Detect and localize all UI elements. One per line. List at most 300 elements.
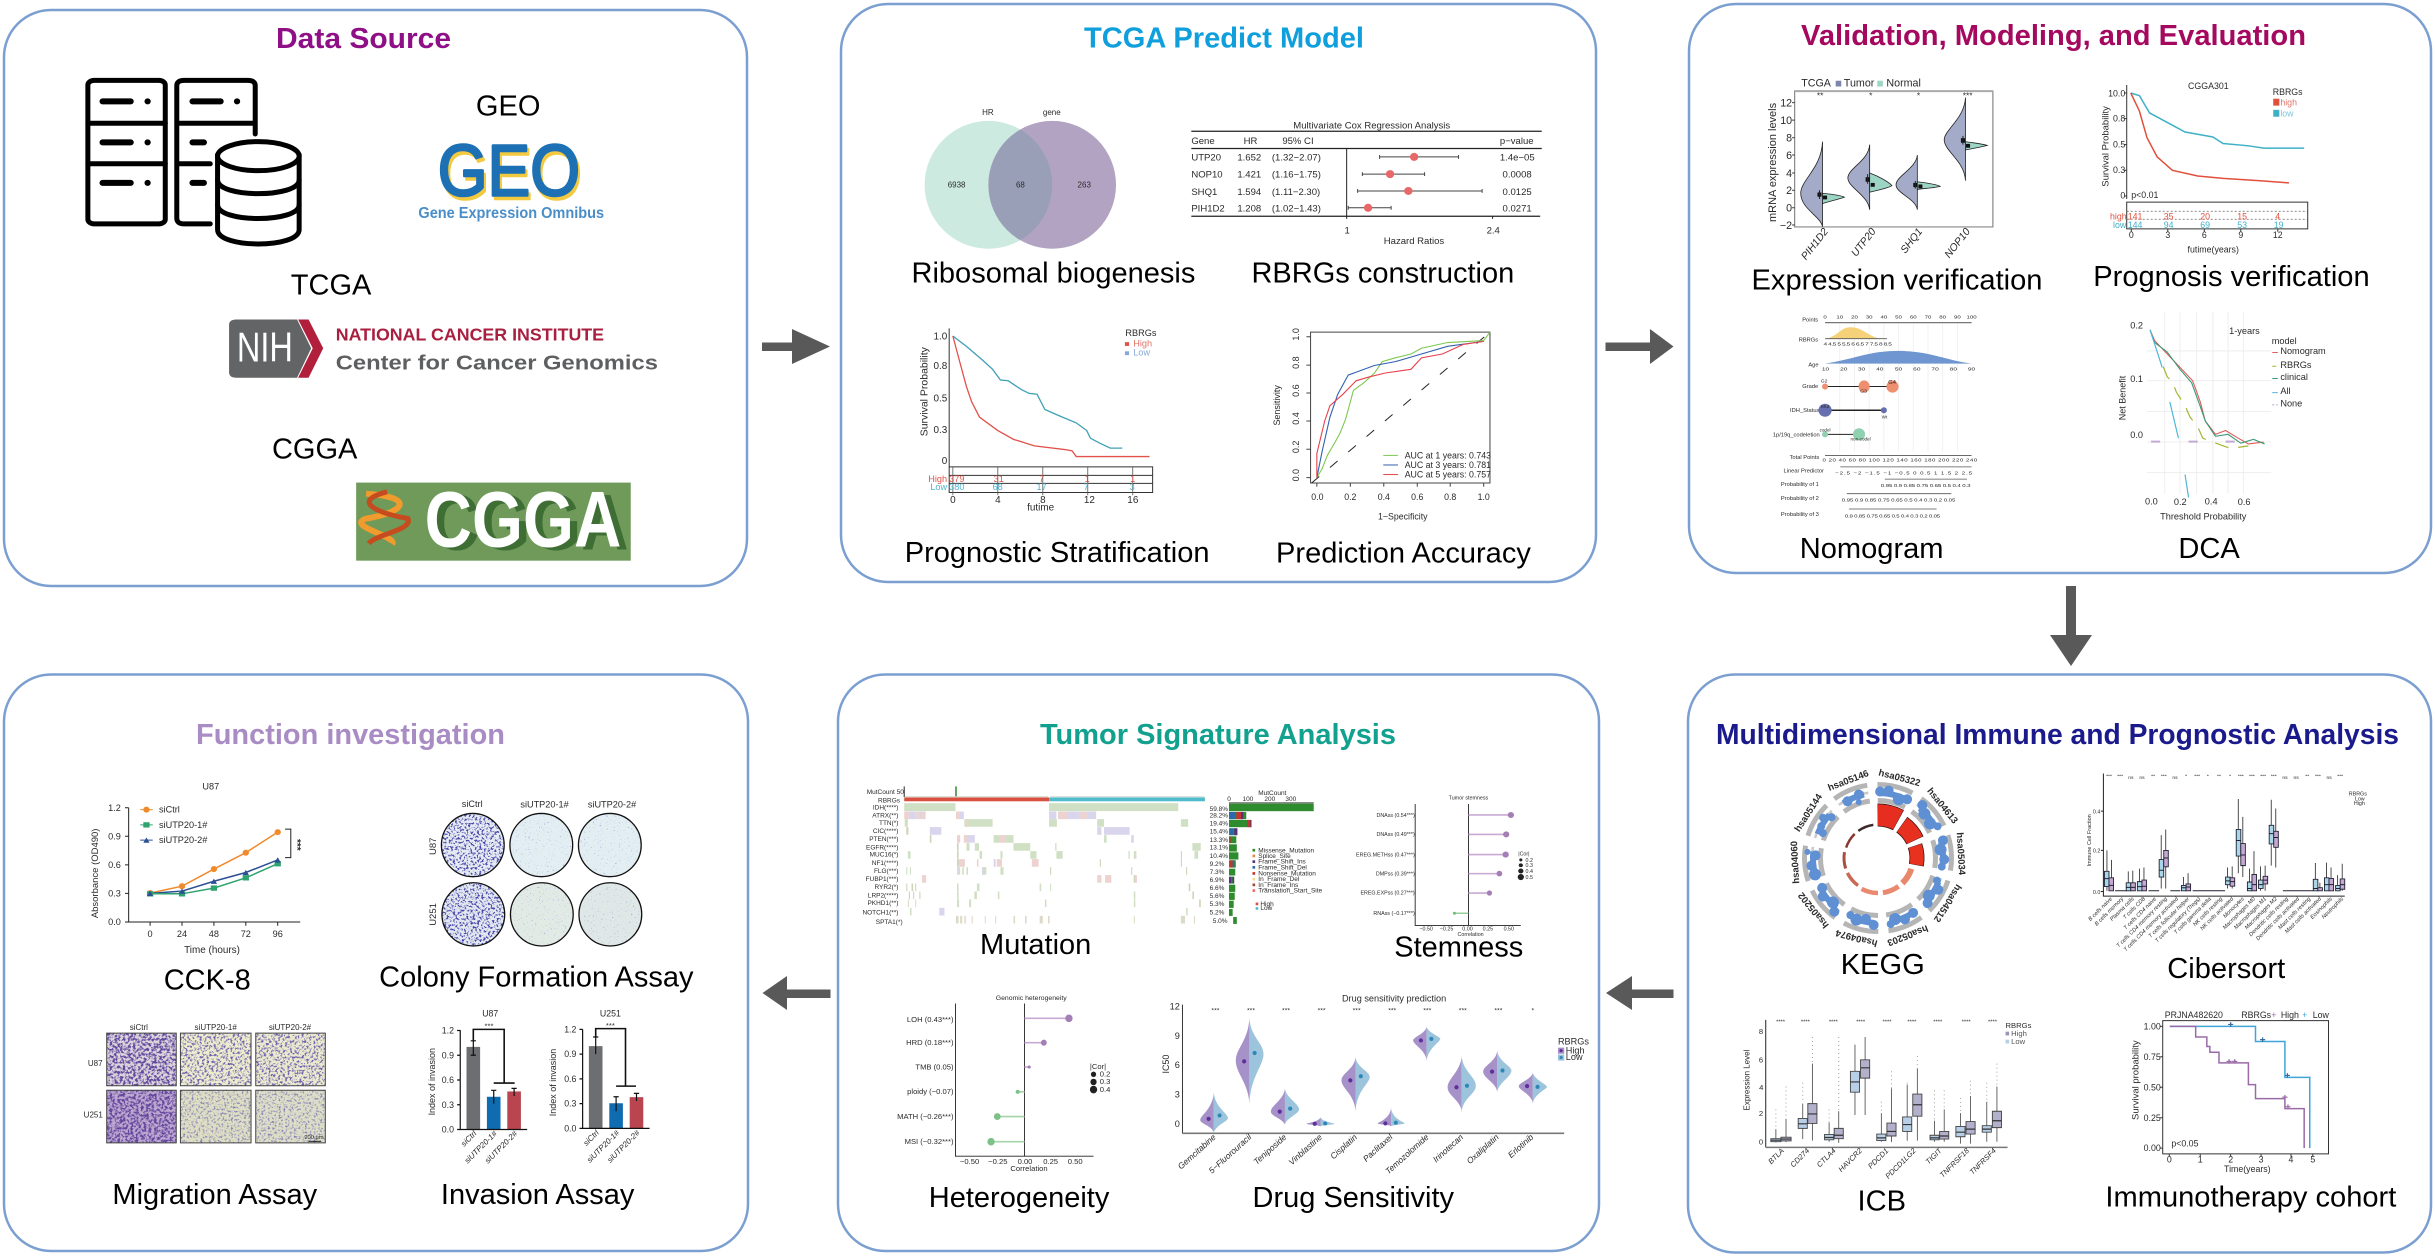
caption: Colony Formation Assay <box>379 962 694 994</box>
colony formation plates: U251 <box>428 903 439 926</box>
box plot: Cibersort immune fractions: Monocytes <box>2222 896 2246 920</box>
survival curve: immunotherapy cohort: 3 <box>2259 1155 2264 1165</box>
oncoplot: mutation landscape: RYR2(*) <box>874 884 898 891</box>
bar chart: invasion U87: siCtrl <box>459 1129 479 1148</box>
box plot: Cibersort immune fractions: ** <box>2217 774 2221 780</box>
forest plot: multivariate Cox: 0.0125 <box>1503 187 1532 198</box>
oncoplot: mutation landscape: 100 <box>1242 796 1254 803</box>
nomogram: 50 <box>1895 315 1902 320</box>
lollipop chart: tumor stemness: Tumor stemness <box>1449 795 1489 801</box>
survival curve: CGGA301: 144 <box>2128 220 2143 230</box>
oncoplot: mutation landscape: 300 <box>1285 796 1297 803</box>
lollipop chart: genomic heterogeneity: ploidy (−0.07) <box>907 1087 954 1096</box>
forest plot: multivariate Cox: 0.0008 <box>1503 170 1532 181</box>
bar chart: invasion U87: 0.0 <box>442 1125 454 1135</box>
ROC curves: Sensitivity <box>1272 385 1282 426</box>
ROC curves: AUC at 1 years: 0.743 <box>1405 450 1491 460</box>
oncoplot: mutation landscape: 19.4% <box>1210 821 1228 828</box>
violin chart: mRNA expression: PIH1D2 <box>1800 226 1831 262</box>
box plot: Cibersort immune fractions: * <box>2207 774 2209 780</box>
lollipop chart: tumor stemness: 0.2 <box>1526 858 1533 864</box>
box plot: Cibersort immune fractions <box>2087 773 2367 953</box>
oncoplot: mutation landscape: Translation_Start_Site <box>1258 888 1323 895</box>
decision curve analysis: clinical <box>2280 372 2308 382</box>
split violin chart: drug sensitivity: RBRGs <box>1558 1037 1589 1047</box>
nomogram: Probability of 1 <box>1781 482 1819 488</box>
box plot: immune checkpoint genes: PDCD1 <box>1866 1146 1890 1171</box>
oncoplot: mutation landscape: 5.2% <box>1210 909 1225 916</box>
bar chart: invasion U251: siUTP20-1# <box>585 1128 622 1165</box>
violin chart: mRNA expression: 6 <box>1786 150 1792 162</box>
box plot: Cibersort immune fractions: * <box>2185 774 2187 780</box>
logo: CGGA: CGGA <box>425 476 621 564</box>
oncoplot: mutation landscape: Frame_Shift_Ins <box>1258 859 1306 866</box>
survival curve: high vs low: 0 <box>942 456 948 467</box>
bar chart: invasion U251 <box>548 1008 650 1165</box>
line chart: CCK-8: 1.2 <box>108 803 121 813</box>
heading: Tumor Signature Analysis: Tumor Signature Analysis <box>1040 719 1396 751</box>
decision curve analysis <box>2118 312 2326 521</box>
bar chart: invasion U87: *** <box>485 1022 493 1031</box>
decision curve analysis: All <box>2280 386 2291 396</box>
nomogram: Linear Predictor <box>1783 469 1824 475</box>
box plot: Cibersort immune fractions: ns <box>2172 776 2178 781</box>
split violin chart: drug sensitivity: *** <box>1211 1008 1220 1015</box>
survival curve: high vs low: 68 <box>993 482 1003 492</box>
nomogram: 60 <box>1910 315 1917 320</box>
box plot: immune checkpoint genes: High <box>2011 1029 2027 1038</box>
circular KEGG enrichment plot: hsa05202 <box>1796 890 1832 930</box>
heading: Function investigation: Function investigation <box>196 719 505 751</box>
survival curve: immunotherapy cohort: + <box>2302 1010 2307 1020</box>
logo: Gene Expression Omnibus: GEO <box>440 134 582 215</box>
decision curve analysis: Nomogram <box>2280 346 2326 356</box>
box plot: Cibersort immune fractions: Macrophages M2 <box>2244 896 2279 931</box>
lollipop chart: tumor stemness: EREG.METHss (0.47***) <box>1356 852 1415 858</box>
survival curve: high vs low: 1 <box>1085 474 1090 484</box>
violin chart: mRNA expression: UTP20 <box>1850 226 1879 259</box>
survival curve: high vs low: Low <box>930 482 948 492</box>
survival curve: high vs low: 0.8 <box>933 361 948 372</box>
bar chart: invasion U251: 0.6 <box>564 1074 577 1084</box>
box plot: Cibersort immune fractions: ns <box>2128 776 2134 781</box>
decision curve analysis: 0.2 <box>2174 497 2187 507</box>
line chart: CCK-8: 48 <box>209 929 219 939</box>
survival curve: high vs low: 7 <box>1084 482 1089 492</box>
lollipop chart: tumor stemness: DMPss (0.39***) <box>1376 872 1415 878</box>
survival curve: immunotherapy cohort: 0.25 <box>2144 1113 2161 1123</box>
nomogram: 90 <box>1968 367 1976 372</box>
bar chart: invasion U251: U251 <box>600 1008 621 1018</box>
lollipop chart: tumor stemness: 0.50 <box>1504 927 1514 933</box>
oncoplot: mutation landscape: Frame_Shift_Del <box>1258 864 1307 871</box>
forest plot: multivariate Cox: (1.02−1.43) <box>1272 204 1321 215</box>
box plot: Cibersort immune fractions: *** <box>2315 774 2321 780</box>
forest plot: multivariate Cox: Gene <box>1191 136 1215 147</box>
box plot: Cibersort immune fractions: Dendritic cells activated <box>2255 896 2302 942</box>
logo: NIH National Cancer Institute: Center for Cancer Genomics <box>336 352 658 374</box>
colony formation plates: siUTP20-2# <box>588 800 637 810</box>
ROC curves: 0.8 <box>1444 492 1456 502</box>
bar chart: invasion U87: U87 <box>482 1008 498 1018</box>
oncoplot: mutation landscape: FLG(***) <box>874 868 898 875</box>
box plot: immune checkpoint genes: **** <box>1962 1020 1971 1026</box>
split violin chart: drug sensitivity: Irinotecan <box>1431 1132 1465 1164</box>
violin chart: mRNA expression: 10 <box>1780 115 1792 127</box>
forest plot: multivariate Cox: Multivariate Cox Regression Analysis <box>1293 121 1450 132</box>
nomogram: non-codel <box>1850 436 1871 441</box>
oncoplot: mutation landscape: 5.0% <box>1213 918 1228 925</box>
panel: Validation, Modeling, and Evaluation <box>1689 4 2431 573</box>
line chart: CCK-8: U87 <box>202 781 219 791</box>
oncoplot: mutation landscape: MutCount <box>1258 790 1287 797</box>
survival curve: CGGA301: 9 <box>2238 230 2243 240</box>
ROC curves: 1.0 <box>1478 492 1490 502</box>
ROC curves: 0.2 <box>1291 441 1301 453</box>
heading: TCGA Predict Model: TCGA Predict Model <box>1084 22 1364 54</box>
box plot: Cibersort immune fractions: T cells CD4 memory resting <box>2116 896 2169 949</box>
survival curve: immunotherapy cohort: 0 <box>2167 1155 2172 1165</box>
nomogram: 0.9 0.85 0.75 0.65 0.5 0.4 0.3 0.2 0.05 <box>1845 514 1940 519</box>
lollipop chart: tumor stemness: 0.4 <box>1526 869 1533 875</box>
caption: Mutation <box>980 929 1091 961</box>
oncoplot: mutation landscape: Nonsense_Mutation <box>1258 871 1316 878</box>
venn diagram: HR <box>982 108 994 117</box>
split violin chart: drug sensitivity: *** <box>1247 1008 1255 1015</box>
line chart: CCK-8: 0.0 <box>108 917 121 927</box>
oncoplot: mutation landscape: PKHD1(**) <box>867 900 898 907</box>
bar chart: invasion U87: Index of invasion <box>427 1048 437 1115</box>
survival curve: CGGA301: 35 <box>2164 212 2174 222</box>
box plot: Cibersort immune fractions: B cells memory <box>2094 895 2126 928</box>
survival curve: CGGA301: high <box>2280 98 2297 108</box>
heading: Multidimensional Immune and Prognostic Analysis: Multidimensional Immune and Prognostic Analysis <box>1716 719 2399 751</box>
oncoplot: mutation landscape: In_Frame_Ins <box>1258 882 1298 889</box>
box plot: Cibersort immune fractions: Immune Cell Fraction <box>2087 814 2093 866</box>
forest plot: multivariate Cox: (1.16−1.75) <box>1272 170 1321 181</box>
oncoplot: mutation landscape: 6.9% <box>1210 877 1225 884</box>
box plot: immune checkpoint genes: **** <box>1776 1020 1786 1026</box>
migration assay images: 200 μm <box>304 1135 324 1141</box>
oncoplot: mutation landscape: ATRX(**) <box>872 812 898 819</box>
panel: Function investigation <box>4 674 748 1251</box>
forest plot: multivariate Cox: Hazard Ratios <box>1384 236 1444 247</box>
ROC curves: 0.6 <box>1291 384 1301 397</box>
lollipop chart: tumor stemness: −0.25 <box>1440 927 1453 933</box>
box plot: Cibersort immune fractions: *** <box>2271 774 2277 780</box>
split violin chart: drug sensitivity: *** <box>1388 1008 1397 1015</box>
survival curve: immunotherapy cohort: 2 <box>2228 1155 2233 1165</box>
lollipop chart: tumor stemness: DNAss (0.49***) <box>1376 832 1415 838</box>
lollipop chart: genomic heterogeneity: −0.50 <box>960 1157 979 1166</box>
nomogram: 80 <box>1939 315 1946 320</box>
box plot: immune checkpoint genes: **** <box>1883 1020 1892 1026</box>
box plot: immune checkpoint genes: 4 <box>1759 1083 1764 1092</box>
colony formation plates: U87 <box>428 838 439 855</box>
oncoplot: mutation landscape: LRP2(****) <box>868 893 898 900</box>
violin chart: mRNA expression: 2 <box>1786 185 1792 197</box>
box plot: Cibersort immune fractions: RBRGs <box>2349 792 2367 798</box>
ROC curves: AUC at 5 years: 0.757 <box>1405 470 1491 480</box>
line chart: CCK-8: siUTP20-1# <box>159 820 208 830</box>
survival curve: CGGA301: 94 <box>2164 220 2174 230</box>
circular KEGG enrichment plot: hsa04974 <box>1834 927 1879 949</box>
heading: Data Source: Data Source <box>276 23 451 55</box>
nomogram: 4 4.5 5 5.5 6 6.5 7 7.5 8 8.5 <box>1824 342 1892 347</box>
ROC curves: 0.4 <box>1291 412 1301 425</box>
bar chart: invasion U87: 0.3 <box>442 1100 454 1110</box>
oncoplot: mutation landscape: RBRGs <box>878 797 900 804</box>
split violin chart: drug sensitivity: Temozolomide <box>1383 1132 1431 1176</box>
box plot: Cibersort immune fractions: *** <box>2337 774 2343 780</box>
lollipop chart: tumor stemness <box>1356 795 1533 938</box>
violin chart: mRNA expression: Normal <box>1886 77 1921 89</box>
box plot: Cibersort immune fractions: ** <box>2151 774 2155 780</box>
circular KEGG enrichment plot: hsa05034 <box>1954 832 1967 876</box>
oncoplot: mutation landscape: 28.2% <box>1210 813 1228 820</box>
split violin chart: drug sensitivity: Erlotinib <box>1506 1132 1535 1160</box>
survival curve: high vs low: High <box>928 474 947 484</box>
survival curve: immunotherapy cohort: 0.50 <box>2144 1082 2161 1092</box>
survival curve: CGGA301: low <box>2113 220 2127 230</box>
bar chart: invasion U251: 1.2 <box>564 1024 577 1034</box>
circular KEGG enrichment plot <box>1789 767 1967 949</box>
survival curve: CGGA301: 0.3 <box>2113 165 2125 175</box>
box plot: Cibersort immune fractions: NK cells resting <box>2192 896 2225 928</box>
split violin chart: drug sensitivity: Gemcitabine <box>1176 1132 1218 1171</box>
caption: DCA <box>2178 533 2240 565</box>
caption: Cibersort <box>2167 953 2285 985</box>
survival curve: high vs low <box>920 328 1157 514</box>
bar chart: invasion U87: 0.9 <box>442 1050 454 1060</box>
nomogram: Probability of 3 <box>1781 512 1819 518</box>
survival curve: CGGA301: 69 <box>2200 220 2210 230</box>
box plot: Cibersort immune fractions: T cells follicular helper <box>2148 896 2192 940</box>
ROC curves: 0.2 <box>1344 492 1357 502</box>
box plot: Cibersort immune fractions: T cells gamma delta <box>2173 896 2213 936</box>
split violin chart: drug sensitivity: 6 <box>1175 1060 1180 1070</box>
split violin chart: drug sensitivity: *** <box>1459 1008 1467 1015</box>
nomogram: Grade <box>1802 384 1818 390</box>
line chart: CCK-8: *** <box>291 839 302 851</box>
box plot: Cibersort immune fractions: Plasma cells <box>2109 896 2136 923</box>
ROC curves <box>1272 328 1491 522</box>
circular KEGG enrichment plot: hsa05144 <box>1793 792 1825 834</box>
nomogram: 30 <box>1866 315 1873 320</box>
forest plot: multivariate Cox: 1.208 <box>1237 204 1261 215</box>
survival curve: immunotherapy cohort: 0.75 <box>2144 1052 2161 1062</box>
survival curve: high vs low: 0.5 <box>933 393 948 404</box>
ROC curves: 0.6 <box>1411 492 1423 502</box>
violin chart: mRNA expression: 8 <box>1786 133 1792 145</box>
box plot: immune checkpoint genes: BTLA <box>1766 1146 1786 1166</box>
lollipop chart: genomic heterogeneity: |Cor| <box>1090 1062 1106 1071</box>
box plot: Cibersort immune fractions: *** <box>2106 774 2112 780</box>
survival curve: CGGA301: 10.0 <box>2108 88 2125 98</box>
line chart: CCK-8: Absorbance (OD490) <box>90 829 101 918</box>
box plot: Cibersort immune fractions: 0.2 <box>2093 849 2100 855</box>
caption: Nomogram <box>1800 533 1944 565</box>
caption: Prognosis verification <box>2093 261 2370 293</box>
nomogram: codel <box>1820 428 1831 433</box>
logo: NIH National Cancer Institute: NATIONAL CANCER INSTITUTE <box>336 326 604 345</box>
survival curve: CGGA301: Survival Probability <box>2100 106 2111 187</box>
oncoplot: mutation landscape: TTN(*) <box>879 820 898 827</box>
lollipop chart: tumor stemness: RNAss (−0.17***) <box>1373 911 1415 917</box>
label: GEO: GEO <box>476 91 540 123</box>
nomogram: 0 20 40 60 80 100 120 140 160 180 200 220 240 <box>1823 458 1977 463</box>
oncoplot: mutation landscape: 200 <box>1264 796 1276 803</box>
box plot: Cibersort immune fractions: * <box>2229 774 2231 780</box>
forest plot: multivariate Cox <box>1191 121 1542 247</box>
oncoplot: mutation landscape: 15.4% <box>1210 829 1228 836</box>
logo: CGGA <box>356 476 631 567</box>
forest plot: multivariate Cox: 95% CI <box>1282 136 1314 147</box>
box plot: Cibersort immune fractions: *** <box>2238 774 2244 780</box>
oncoplot: mutation landscape: 7.3% <box>1210 869 1225 876</box>
line chart: CCK-8: 0 <box>148 929 153 939</box>
box plot: Cibersort immune fractions: High <box>2354 801 2365 807</box>
decision curve analysis: 0.1 <box>2130 374 2143 384</box>
survival curve: CGGA301: 53 <box>2237 220 2247 230</box>
oncoplot: mutation landscape: FUBP1(***) <box>866 876 898 883</box>
arrow: tumor signature to function investigation <box>762 976 830 1010</box>
box plot: immune checkpoint genes: TNFRSF18 <box>1938 1146 1972 1179</box>
logo: Gene Expression Omnibus: GEO <box>438 130 580 211</box>
box plot: Cibersort immune fractions: Mast cells resting <box>2277 896 2313 931</box>
box plot: immune checkpoint genes: Expression Level <box>1743 1049 1752 1110</box>
bar chart: invasion U251: siUTP20-2# <box>605 1128 642 1165</box>
split violin chart: drug sensitivity: Oxaliplatin <box>1465 1132 1501 1166</box>
line chart: CCK-8: 0.6 <box>108 860 121 870</box>
box plot: Cibersort immune fractions: T cells regulatory (Tregs) <box>2154 896 2202 944</box>
label: CGGA: CGGA <box>272 433 358 465</box>
survival curve: immunotherapy cohort: Survival probability <box>2130 1040 2141 1120</box>
box plot: immune checkpoint genes: 0 <box>1759 1137 1763 1146</box>
box plot: Cibersort immune fractions: T cells CD4 memory activated <box>2123 896 2180 953</box>
forest plot: multivariate Cox: (1.11−2.30) <box>1272 187 1320 198</box>
survival curve: CGGA301: high <box>2110 212 2127 222</box>
box plot: immune checkpoint genes: **** <box>1801 1020 1811 1026</box>
ROC curves: AUC at 3 years: 0.781 <box>1405 460 1491 470</box>
split violin chart: drug sensitivity: 0 <box>1175 1119 1180 1129</box>
lollipop chart: genomic heterogeneity: Genomic heterogeneity <box>996 995 1067 1002</box>
violin chart: mRNA expression: NOP10 <box>1943 226 1973 260</box>
split violin chart: drug sensitivity: 3 <box>1175 1090 1180 1100</box>
survival curve: high vs low: 380 <box>949 482 964 492</box>
survival curve: high vs low: 12 <box>1084 495 1095 506</box>
icon: server racks and database <box>88 80 299 244</box>
box plot: Cibersort immune fractions: NK cells activated <box>2200 896 2236 932</box>
nomogram: G4 <box>1888 380 1897 386</box>
split violin chart: drug sensitivity: 9 <box>1175 1031 1180 1041</box>
survival curve: high vs low: 379 <box>949 474 964 484</box>
nomogram: 50 <box>1895 367 1903 372</box>
survival curve: CGGA301: 19 <box>2274 220 2284 230</box>
split violin chart: drug sensitivity: High <box>1566 1045 1585 1055</box>
logo: NIH National Cancer Institute <box>229 320 658 378</box>
panel: Data Source <box>4 10 747 586</box>
migration assay images: siUTP20-1# <box>195 1023 237 1032</box>
oncoplot: mutation landscape: Low <box>1260 905 1273 912</box>
ROC curves: 1.0 <box>1291 328 1301 341</box>
box plot: Cibersort immune fractions: 0.0 <box>2093 890 2100 896</box>
nomogram: 70 <box>1925 315 1931 320</box>
box plot: immune checkpoint genes: **** <box>1988 1020 1998 1026</box>
circular KEGG enrichment plot: hsa04060 <box>1789 841 1802 884</box>
lollipop chart: genomic heterogeneity: 0.00 <box>1018 1157 1032 1166</box>
oncoplot: mutation landscape: High <box>1260 901 1274 908</box>
decision curve analysis: RBRGs <box>2280 360 2312 370</box>
bar chart: invasion U87: 1.2 <box>442 1026 454 1036</box>
split violin chart: drug sensitivity: 5−Fluorouracil <box>1207 1131 1254 1176</box>
caption: Ribosomal biogenesis <box>912 257 1195 289</box>
survival curve: CGGA301: RBRGs <box>2273 87 2303 97</box>
box plot: Cibersort immune fractions: Dendritic cells resting <box>2248 896 2290 938</box>
nomogram: −2.5 −2 −1.5 −1 −0.5 0 0.5 1 1.5 2 2.5 <box>1835 471 1972 476</box>
box plot: Cibersort immune fractions: *** <box>2260 774 2266 780</box>
nomogram: Probability of 2 <box>1781 496 1819 502</box>
box plot: Cibersort immune fractions: Eosinophils <box>2310 896 2334 921</box>
caption: Stemness <box>1394 931 1523 963</box>
box plot: immune checkpoint genes: TIGIT <box>1924 1145 1945 1166</box>
violin chart: mRNA expression: 4 <box>1786 168 1792 180</box>
venn diagram: 68 <box>1016 181 1025 190</box>
colony formation plates <box>428 799 644 947</box>
split violin chart: drug sensitivity: *** <box>1423 1008 1432 1015</box>
violin chart: mRNA expression: 12 <box>1780 97 1792 109</box>
box plot: immune checkpoint genes: CD274 <box>1788 1146 1811 1169</box>
logo: CGGA: CGGA <box>432 479 629 567</box>
survival curve: high vs low: 17 <box>1037 482 1047 492</box>
nomogram: 20 <box>1851 315 1858 320</box>
arrow: TCGA model to validation <box>1606 329 1674 364</box>
panel: Tumor Signature Analysis <box>838 674 1599 1251</box>
decision curve analysis: Threshold Probability <box>2160 511 2247 521</box>
forest plot: multivariate Cox: PIH1D2 <box>1191 204 1225 215</box>
violin chart: mRNA expression: * <box>1917 90 1921 100</box>
caption: ICB <box>1858 1185 1906 1217</box>
survival curve: immunotherapy cohort: 4 <box>2289 1155 2294 1165</box>
line chart: CCK-8: 24 <box>177 929 187 939</box>
box plot: Cibersort immune fractions: Macrophages M1 <box>2233 896 2268 931</box>
forest plot: multivariate Cox: (1.32−2.07) <box>1272 153 1321 164</box>
lollipop chart: genomic heterogeneity: Correlation <box>1010 1164 1048 1173</box>
lollipop chart: genomic heterogeneity: MSI (−0.32***) <box>905 1137 954 1146</box>
bar chart: invasion U251: *** <box>606 1021 615 1030</box>
nomogram: RBRGs <box>1799 337 1818 343</box>
oncoplot: mutation landscape: 13.3% <box>1210 837 1228 844</box>
migration assay images: siUTP20-2# <box>269 1023 312 1032</box>
survival curve: CGGA301: 4 <box>2275 212 2280 222</box>
line chart: CCK-8: Time (hours) <box>184 945 240 956</box>
survival curve: high vs low: RBRGs <box>1125 328 1157 338</box>
oncoplot: mutation landscape: IDH(****) <box>873 804 898 811</box>
box plot: immune checkpoint genes: **** <box>1907 1020 1917 1026</box>
decision curve analysis: 0.0 <box>2145 496 2158 506</box>
forest plot: multivariate Cox: SHQ1 <box>1191 187 1217 198</box>
box plot: Cibersort immune fractions: T cells CD4 naive <box>2123 896 2158 931</box>
colony formation plates: siCtrl <box>462 799 483 809</box>
arrow: validation to immune analysis <box>2050 586 2092 666</box>
lollipop chart: genomic heterogeneity: LOH (0.43***) <box>907 1015 954 1024</box>
box plot: immune checkpoint genes: RBRGs <box>2006 1021 2032 1030</box>
nomogram: 80 <box>1950 367 1958 372</box>
survival curve: immunotherapy cohort: 1 <box>2198 1155 2203 1165</box>
box plot: immune checkpoint genes <box>1743 1020 2032 1181</box>
nomogram: 1p/19q_codeletion <box>1773 433 1820 439</box>
arrow: Data Source to TCGA model <box>762 329 830 364</box>
